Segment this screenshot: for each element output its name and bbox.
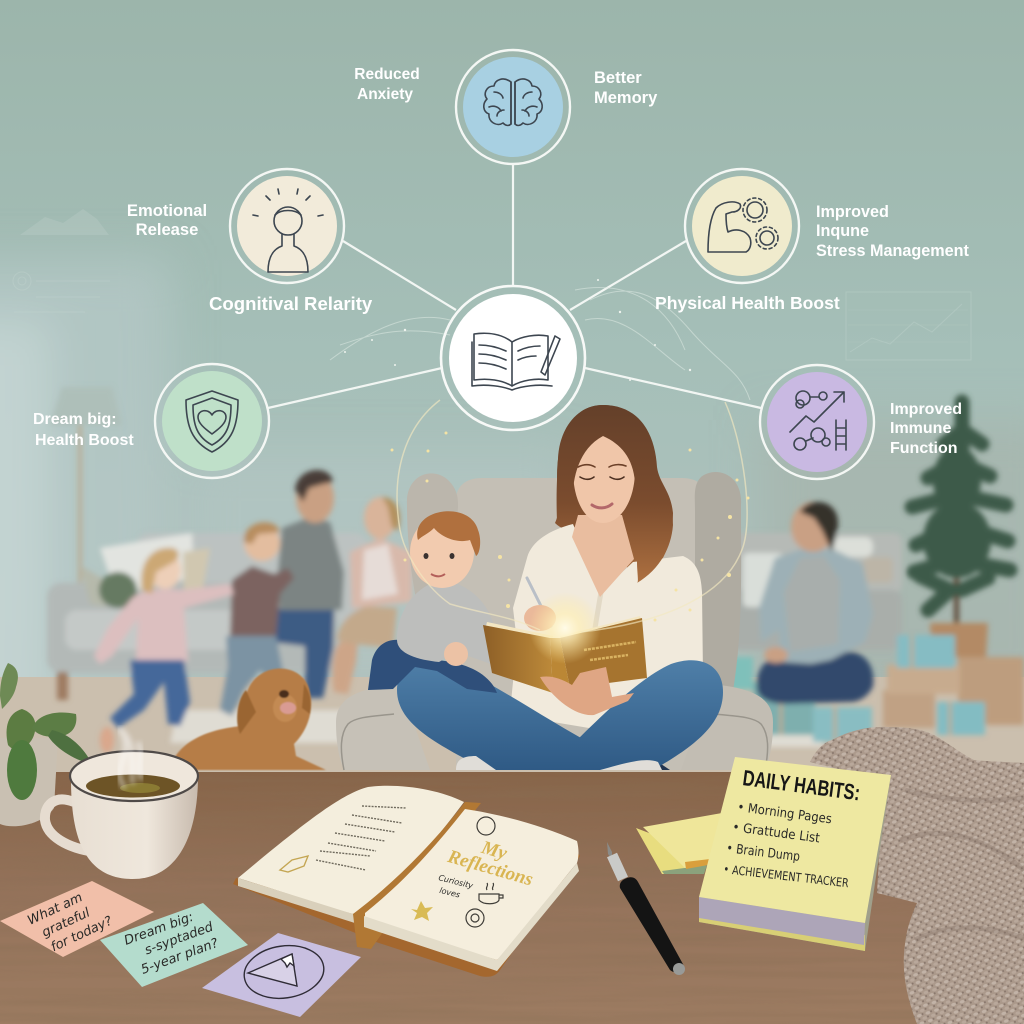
icon: shield with heart [186, 391, 238, 452]
tea cup [45, 728, 198, 879]
label: improved immune function: Function [890, 440, 958, 457]
journal title: Reflections [444, 846, 535, 890]
node: emotional release [230, 169, 344, 283]
central hub: journal [441, 286, 585, 430]
star [411, 901, 433, 921]
floor lamp [50, 387, 122, 595]
icon: muscle and gears [708, 198, 778, 252]
icon: person with thoughts [253, 189, 323, 272]
habit list: • ACHIEVEMENT TRACKER [723, 862, 849, 890]
armchair [336, 472, 773, 770]
face [573, 436, 635, 523]
cardigan [511, 524, 703, 730]
journal doodle [280, 856, 308, 872]
wooden table [0, 772, 1024, 1024]
icon: brain [484, 79, 542, 125]
node: improved immune, stress management [685, 169, 799, 283]
dog [170, 668, 326, 770]
potted plant [0, 663, 92, 826]
reflection prompt: mint card: 5-year plan? [139, 936, 221, 978]
journal doodles [466, 817, 503, 927]
socks [456, 756, 662, 770]
small sticky stack [636, 813, 722, 874]
jeans [480, 730, 670, 770]
glowing open book [483, 578, 647, 715]
reflection prompt: mint card: s-syptaded [143, 919, 216, 958]
girl [94, 548, 234, 753]
woman reading [397, 405, 723, 770]
habit list: • Morning Pages [736, 800, 833, 827]
journal subtitle: Curiosity [438, 873, 474, 891]
woman in pink [332, 497, 412, 694]
label: improved immune stress management: Inqune [816, 222, 869, 240]
blanket [810, 727, 1024, 1024]
label: reduced anxiety: Reduced [354, 66, 420, 83]
reflection card: mountain drawing [202, 933, 361, 1017]
label: emotional release: Emotional [127, 201, 207, 220]
label: dream big health boost: Dream big: [33, 411, 117, 428]
man right [757, 502, 873, 704]
hair back [555, 405, 673, 583]
sticky title: DAILY HABITS: [741, 765, 862, 805]
node: better memory / reduced anxiety brain [456, 50, 570, 164]
facial features [578, 465, 626, 508]
sofa right [728, 533, 902, 650]
cardigan placket [595, 592, 601, 628]
habit list [723, 800, 849, 890]
sparkle halo around woman [390, 400, 750, 632]
hair front [557, 405, 673, 583]
journal subtitle: loves [438, 886, 461, 900]
fountain pen [607, 842, 685, 975]
label: better memory: Better [594, 69, 642, 87]
open reflection journal [233, 786, 580, 977]
habit list: • Grattude List [731, 820, 821, 846]
label: improved immune stress management: Improved [816, 203, 889, 221]
label: better memory: Memory [594, 89, 658, 107]
reflection prompt: pink card: What am [25, 890, 85, 929]
icon: open book and pen [472, 333, 560, 390]
daily habits sticky note [699, 757, 891, 951]
man in grey [271, 470, 344, 698]
baby [368, 511, 497, 693]
reflection prompt: pink card: grateful [40, 905, 93, 941]
reflection prompt: mint card: Dream big: [122, 910, 196, 949]
reflection prompt: pink card [0, 881, 154, 959]
writing hand [524, 605, 556, 631]
reflection prompt: mint card [100, 903, 248, 987]
blanket folds [900, 790, 1024, 940]
journal title: My [478, 837, 510, 864]
label: improved immune stress management: Stress Management [816, 242, 970, 260]
label: emotional release: Release [136, 220, 198, 239]
faded background charts [13, 209, 971, 360]
swirling sparkle lines near hub [330, 279, 750, 400]
reflection prompt: pink card: for today? [49, 914, 115, 955]
wall background [0, 0, 1024, 780]
plant right [912, 402, 1010, 657]
label: dream big health boost: Health Boost [35, 432, 134, 449]
boy [220, 522, 294, 716]
steam [119, 728, 142, 788]
blurred family background [47, 387, 1024, 753]
sofa left [47, 533, 367, 700]
gift boxes [725, 635, 1024, 742]
pen [527, 578, 551, 626]
habit list: • Brain Dump [726, 841, 801, 865]
node: dream big health boost [155, 364, 269, 478]
journal list lines [316, 806, 406, 870]
label: improved immune function: Improved [890, 401, 962, 418]
rugs [170, 710, 823, 747]
holding hand [540, 667, 634, 715]
neck and chest [572, 515, 634, 597]
heading: physical health boost: Physical Health Boost [655, 293, 840, 313]
label: reduced anxiety: Anxiety [357, 86, 413, 103]
icon: network, arrow and ladder [790, 391, 846, 450]
title on book [584, 642, 636, 660]
label: improved immune function: Immune [890, 420, 951, 437]
connector lines [268, 165, 761, 408]
heading: cognitive clarity: Cognitival Relarity [209, 293, 373, 314]
node: improved immune function [760, 365, 874, 479]
